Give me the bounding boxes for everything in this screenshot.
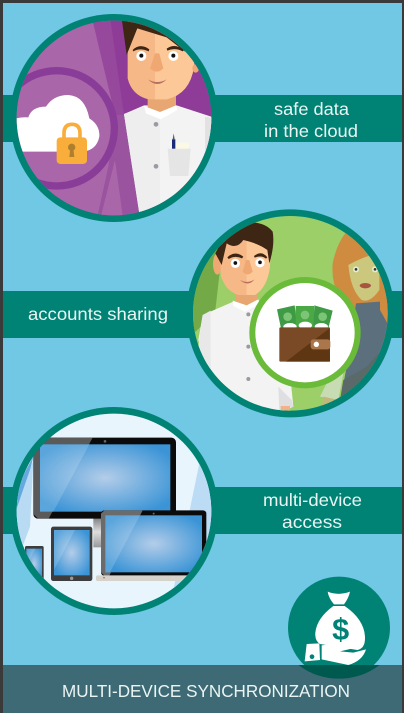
tablet xyxy=(51,527,92,581)
band label: safe data in the cloud: safe data xyxy=(274,99,349,119)
phone xyxy=(25,546,44,583)
icon: money bag in hand badge: $ xyxy=(332,612,349,646)
band label: safe data in the cloud xyxy=(264,99,358,141)
band label: multi-device access: access xyxy=(282,512,342,532)
woman xyxy=(320,233,388,406)
band label: multi-device access xyxy=(263,490,362,532)
monitor xyxy=(33,438,176,547)
footer title: MULTI-DEVICE SYNCHRONIZATION xyxy=(62,681,350,701)
footer bar xyxy=(3,665,402,713)
band: accounts sharing xyxy=(3,291,402,338)
band: safe data xyxy=(3,95,402,142)
man xyxy=(198,223,293,420)
circle: man, woman and wallet xyxy=(186,209,397,420)
circle: cloud security with man xyxy=(0,13,220,223)
band label: safe data in the cloud: in the cloud xyxy=(264,121,358,141)
band label: multi-device access: multi-device xyxy=(263,490,362,510)
icon: cloud with padlock xyxy=(0,71,114,186)
man xyxy=(122,21,212,212)
band: multi-device access xyxy=(3,487,402,534)
laptop xyxy=(96,510,213,581)
icon: money bag in hand badge xyxy=(288,577,390,679)
circle: devices xyxy=(10,407,220,617)
icon: wallet with cash xyxy=(252,280,358,385)
band label: accounts sharing: accounts sharing xyxy=(28,304,168,324)
